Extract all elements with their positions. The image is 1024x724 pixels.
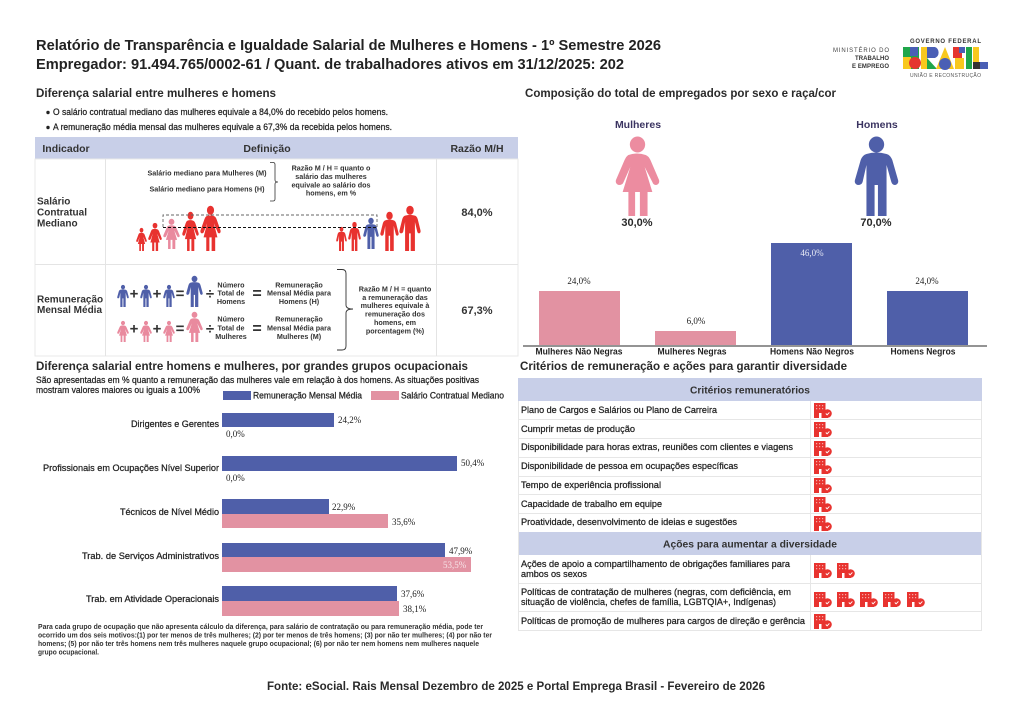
bar chart: composição por raça: Mulheres Negras bbox=[658, 346, 726, 356]
brace and ratio text: mulheres equivale à bbox=[361, 301, 430, 310]
footnote: ocorrido um dos seis motivos:(1) por ter menos de três mulheres; (2) por ter menos de três homens; (3) por não ter mulheres; (4) por não ter bbox=[38, 632, 492, 640]
heading: diferença por grupos: Diferença salarial entre homens e mulheres, por grandes grupos ocupacionais bbox=[36, 359, 468, 373]
group: serviços administrativos: Trab. de Serviços Administrativos bbox=[82, 551, 220, 561]
value: 84,0%: 84,0% bbox=[461, 207, 493, 219]
row: ocupações específicas bbox=[521, 459, 832, 474]
logo: ministério bbox=[833, 47, 889, 70]
logo: ministério: MINISTÉRIO DO bbox=[833, 47, 889, 54]
legend bbox=[223, 390, 504, 400]
definição: salário mediano: equivale ao salário dos bbox=[291, 180, 371, 190]
source: Fonte: eSocial. Rais Mensal Dezembro de 2025 e Portal Emprega Brasil - Fevereiro de 2026 bbox=[267, 679, 765, 693]
definição: remuneração média homens: Número bbox=[217, 280, 245, 290]
definição: remuneração média mulheres: = bbox=[252, 320, 262, 338]
table header bbox=[42, 143, 504, 155]
bar chart: composição por raça: 24,0% bbox=[567, 276, 591, 286]
row: contratação de mulheres bbox=[521, 587, 925, 607]
definição: salário mediano: Salário mediano para Mulheres (M) bbox=[147, 168, 267, 178]
logo: governo federal brasil: UNIÃO E RECONSTRUÇÃO bbox=[910, 72, 981, 79]
brace and ratio text: homens, em bbox=[374, 318, 416, 327]
row label: salário contratual mediano bbox=[37, 196, 87, 230]
definição: salário mediano bbox=[147, 162, 371, 201]
table header: Indicador bbox=[42, 143, 90, 155]
panel: critérios table bbox=[518, 378, 982, 630]
definição: salário mediano: Razão M / H = quanto o bbox=[292, 164, 371, 172]
icon: homens 70,0%: 70,0% bbox=[860, 217, 892, 229]
definição: remuneração média homens bbox=[117, 276, 332, 307]
panel: indicator table bbox=[35, 137, 518, 356]
group: atividade operacional: 37,6% bbox=[401, 589, 425, 599]
brace and ratio text: remuneração dos bbox=[365, 310, 425, 318]
group: profissionais: 0,0% bbox=[226, 473, 245, 483]
text block: explicação: mostram valores maiores ou iguais a 100% bbox=[36, 385, 200, 395]
table header: Definição bbox=[243, 143, 291, 155]
definição: salário mediano: Salário mediano para Homens (H) bbox=[149, 184, 265, 194]
bar chart: composição por raça: Homens Negros bbox=[890, 346, 956, 356]
row: equipe: Capacidade de trabalho em equipe bbox=[521, 499, 662, 509]
definição: remuneração média homens: + bbox=[153, 286, 162, 302]
logo: ministério: TRABALHO bbox=[855, 56, 889, 62]
row label: remuneração mensal média bbox=[37, 294, 103, 316]
definição: remuneração média homens: Mensal Média para bbox=[267, 288, 332, 298]
row: horas extras bbox=[521, 441, 832, 456]
row label: salário contratual mediano: Salário bbox=[37, 196, 70, 208]
row: metas bbox=[521, 422, 832, 437]
definição: remuneração média homens: Total de bbox=[217, 288, 245, 298]
definição: remuneração média homens: + bbox=[130, 286, 139, 302]
icon: homens 70,0%: Homens bbox=[856, 119, 898, 131]
definição: remuneração média homens: Remuneração bbox=[275, 280, 323, 290]
row: equipe bbox=[521, 497, 832, 512]
bar chart: composição por raça: Mulheres Não Negras bbox=[536, 346, 622, 356]
brace and ratio text: a remuneração das bbox=[362, 293, 428, 302]
row: contratação de mulheres: Políticas de contratação de mulheres (negras, com deficiência, em bbox=[521, 587, 791, 597]
icon: homens 70,0% bbox=[855, 119, 898, 229]
definição: remuneração média mulheres: + bbox=[130, 320, 139, 338]
row: apoio familiares: ambos os sexos bbox=[521, 569, 588, 579]
footnote: homens; (5) por não ter três homens nem três mulheres naquele grupo ocupacional; (6) por não ter nem homens nem mulheres naquele bbox=[38, 641, 479, 648]
row: tempo de experiência: Tempo de experiência profissional bbox=[521, 480, 661, 490]
logo: ministério: E EMPREGO bbox=[852, 64, 889, 70]
definição: remuneração média mulheres: + bbox=[153, 320, 162, 338]
row: contratação de mulheres: situação de violência, chefes de família, LGBTQIA+, Indígenas) bbox=[521, 597, 776, 607]
icon: mulheres 30,0%: Mulheres bbox=[615, 119, 661, 131]
title: Empregador: 91.494.765/0002-61 / Quant. de trabalhadores ativos em 31/12/2025: 202 bbox=[36, 57, 624, 73]
group: atividade operacional: Trab. em Atividade Operacionais bbox=[86, 594, 220, 604]
group: serviços administrativos bbox=[82, 543, 473, 572]
group: profissionais bbox=[43, 456, 485, 483]
definição: remuneração média mulheres: ÷ bbox=[206, 320, 214, 338]
row: proatividade bbox=[521, 516, 832, 531]
group: técnicos: Técnicos de Nível Médio bbox=[120, 507, 219, 517]
bar chart: composição por raça: 6,0% bbox=[687, 316, 706, 326]
definição: remuneração média mulheres: = bbox=[176, 320, 185, 338]
footnote bbox=[38, 624, 492, 656]
bar chart: composição por raça: Homens Não Negros bbox=[770, 346, 854, 356]
group: atividade operacional bbox=[86, 586, 427, 616]
bar chart: composição por raça: 46,0% bbox=[800, 248, 824, 258]
definição: remuneração média homens: Homens bbox=[217, 297, 245, 306]
brace and ratio text: Razão M / H = quanto bbox=[359, 284, 432, 294]
group: serviços administrativos: 53,5% bbox=[443, 560, 467, 570]
definição: remuneração média mulheres: Mulheres (M) bbox=[277, 332, 322, 341]
group: profissionais: Profissionais em Ocupações Nível Superior bbox=[43, 463, 219, 473]
brace and ratio text bbox=[337, 270, 432, 350]
heading: composição: Composição do total de empregados por sexo e raça/cor bbox=[525, 86, 836, 100]
definição: remuneração média mulheres bbox=[117, 312, 332, 342]
legend: Remuneração Mensal Média bbox=[253, 390, 362, 400]
definição: remuneração média homens: Homens (H) bbox=[279, 297, 320, 306]
row label: remuneração mensal média: Remuneração bbox=[37, 294, 103, 306]
table header: Razão M/H bbox=[450, 143, 504, 155]
heading: critérios: Critérios de remuneração e ações para garantir diversidade bbox=[520, 359, 847, 373]
row: proatividade: Proatividade, desenvolvimento de ideias e sugestões bbox=[521, 517, 738, 527]
row label: salário contratual mediano: Contratual bbox=[37, 208, 87, 218]
group: dirigentes: 0,0% bbox=[226, 429, 245, 439]
logo: governo federal brasil: GOVERNO FEDERAL bbox=[910, 39, 981, 45]
group: profissionais: 50,4% bbox=[461, 458, 485, 468]
value: 67,3%: 67,3% bbox=[461, 305, 493, 317]
definição: remuneração média homens: ÷ bbox=[206, 286, 214, 302]
row: promoção de mulheres: Políticas de promoção de mulheres para cargos de direção e gerência bbox=[521, 616, 805, 626]
text block: explicação: São apresentadas em % quanto a remuneração das mulheres vale em relação à dos homens. As situações positivas bbox=[36, 375, 479, 385]
row: horas extras: Disponibilidade para horas extras, reuniões com clientes e viagens bbox=[521, 442, 794, 452]
brace and ratio text: porcentagem (%) bbox=[366, 326, 425, 336]
row: tempo de experiência bbox=[521, 478, 832, 493]
title: Relatório de Transparência e Igualdade Salarial de Mulheres e Homens - 1º Semestre 2026 bbox=[36, 38, 661, 54]
row: plano de cargos bbox=[521, 403, 832, 418]
heading: diferença salarial: Diferença salarial entre mulheres e homens bbox=[36, 86, 276, 100]
footnote: Para cada grupo de ocupação que não apresenta cálculo da diferença, para salário de contratação ou para remuneração média, pode ter bbox=[38, 624, 483, 631]
icon: mulheres 30,0%: 30,0% bbox=[621, 217, 653, 229]
row: apoio familiares: Ações de apoio a compartilhamento de obrigações familiares para bbox=[521, 559, 790, 569]
bar chart: grupos ocupacionais bbox=[43, 413, 485, 616]
definição: remuneração média homens: = bbox=[252, 286, 262, 302]
row label: remuneração mensal média: Mensal Média bbox=[37, 305, 102, 316]
row: promoção de mulheres bbox=[521, 614, 832, 629]
definição: remuneração média homens: = bbox=[176, 286, 185, 302]
header: critérios remuneratórios: Critérios remuneratórios bbox=[690, 386, 810, 396]
row: ocupações específicas: Disponibilidade de pessoa em ocupações específicas bbox=[521, 461, 738, 471]
row: apoio familiares bbox=[521, 559, 855, 579]
definição: remuneração média mulheres: Número bbox=[217, 314, 245, 324]
bar chart: composição por raça: 24,0% bbox=[915, 276, 939, 286]
definição: salário mediano: homens, em % bbox=[306, 188, 357, 198]
group: técnicos: 22,9% bbox=[332, 502, 356, 512]
group: dirigentes bbox=[131, 413, 362, 439]
definição: remuneração média mulheres: Remuneração bbox=[275, 314, 323, 324]
footnote: grupo ocupacional. bbox=[38, 650, 99, 656]
bullets: A remuneração média mensal das mulheres equivale a 67,3% da recebida pelos homens. bbox=[53, 122, 392, 132]
legend: Salário Contratual Mediano bbox=[401, 390, 504, 400]
title bbox=[36, 38, 661, 73]
group: técnicos bbox=[120, 499, 416, 528]
text block: explicação bbox=[36, 375, 479, 395]
icon: mulheres 30,0% bbox=[615, 119, 661, 229]
row: metas: Cumprir metas de produção bbox=[521, 424, 635, 434]
bullets bbox=[46, 107, 392, 132]
people: salário mediano bbox=[136, 206, 421, 251]
group: serviços administrativos: 47,9% bbox=[449, 546, 473, 556]
definição: remuneração média mulheres: Mensal Média para bbox=[267, 324, 332, 332]
row: plano de cargos: Plano de Cargos e Salários ou Plano de Carreira bbox=[521, 405, 717, 415]
definição: remuneração média mulheres: Mulheres bbox=[215, 332, 247, 341]
group: atividade operacional: 38,1% bbox=[403, 604, 427, 614]
bar chart: composição por raça bbox=[523, 243, 987, 356]
bullets: O salário contratual mediano das mulheres equivale a 84,0% do recebido pelos homens. bbox=[53, 107, 388, 117]
definição: salário mediano: salário das mulheres bbox=[295, 172, 367, 181]
group: dirigentes: Dirigentes e Gerentes bbox=[131, 419, 219, 429]
definição: remuneração média mulheres: Total de bbox=[217, 324, 245, 332]
row label: salário contratual mediano: Mediano bbox=[37, 218, 78, 230]
logo: governo federal brasil bbox=[903, 39, 988, 79]
group: dirigentes: 24,2% bbox=[338, 415, 362, 425]
group: técnicos: 35,6% bbox=[392, 517, 416, 527]
header: ações: Ações para aumentar a diversidade bbox=[663, 540, 837, 550]
